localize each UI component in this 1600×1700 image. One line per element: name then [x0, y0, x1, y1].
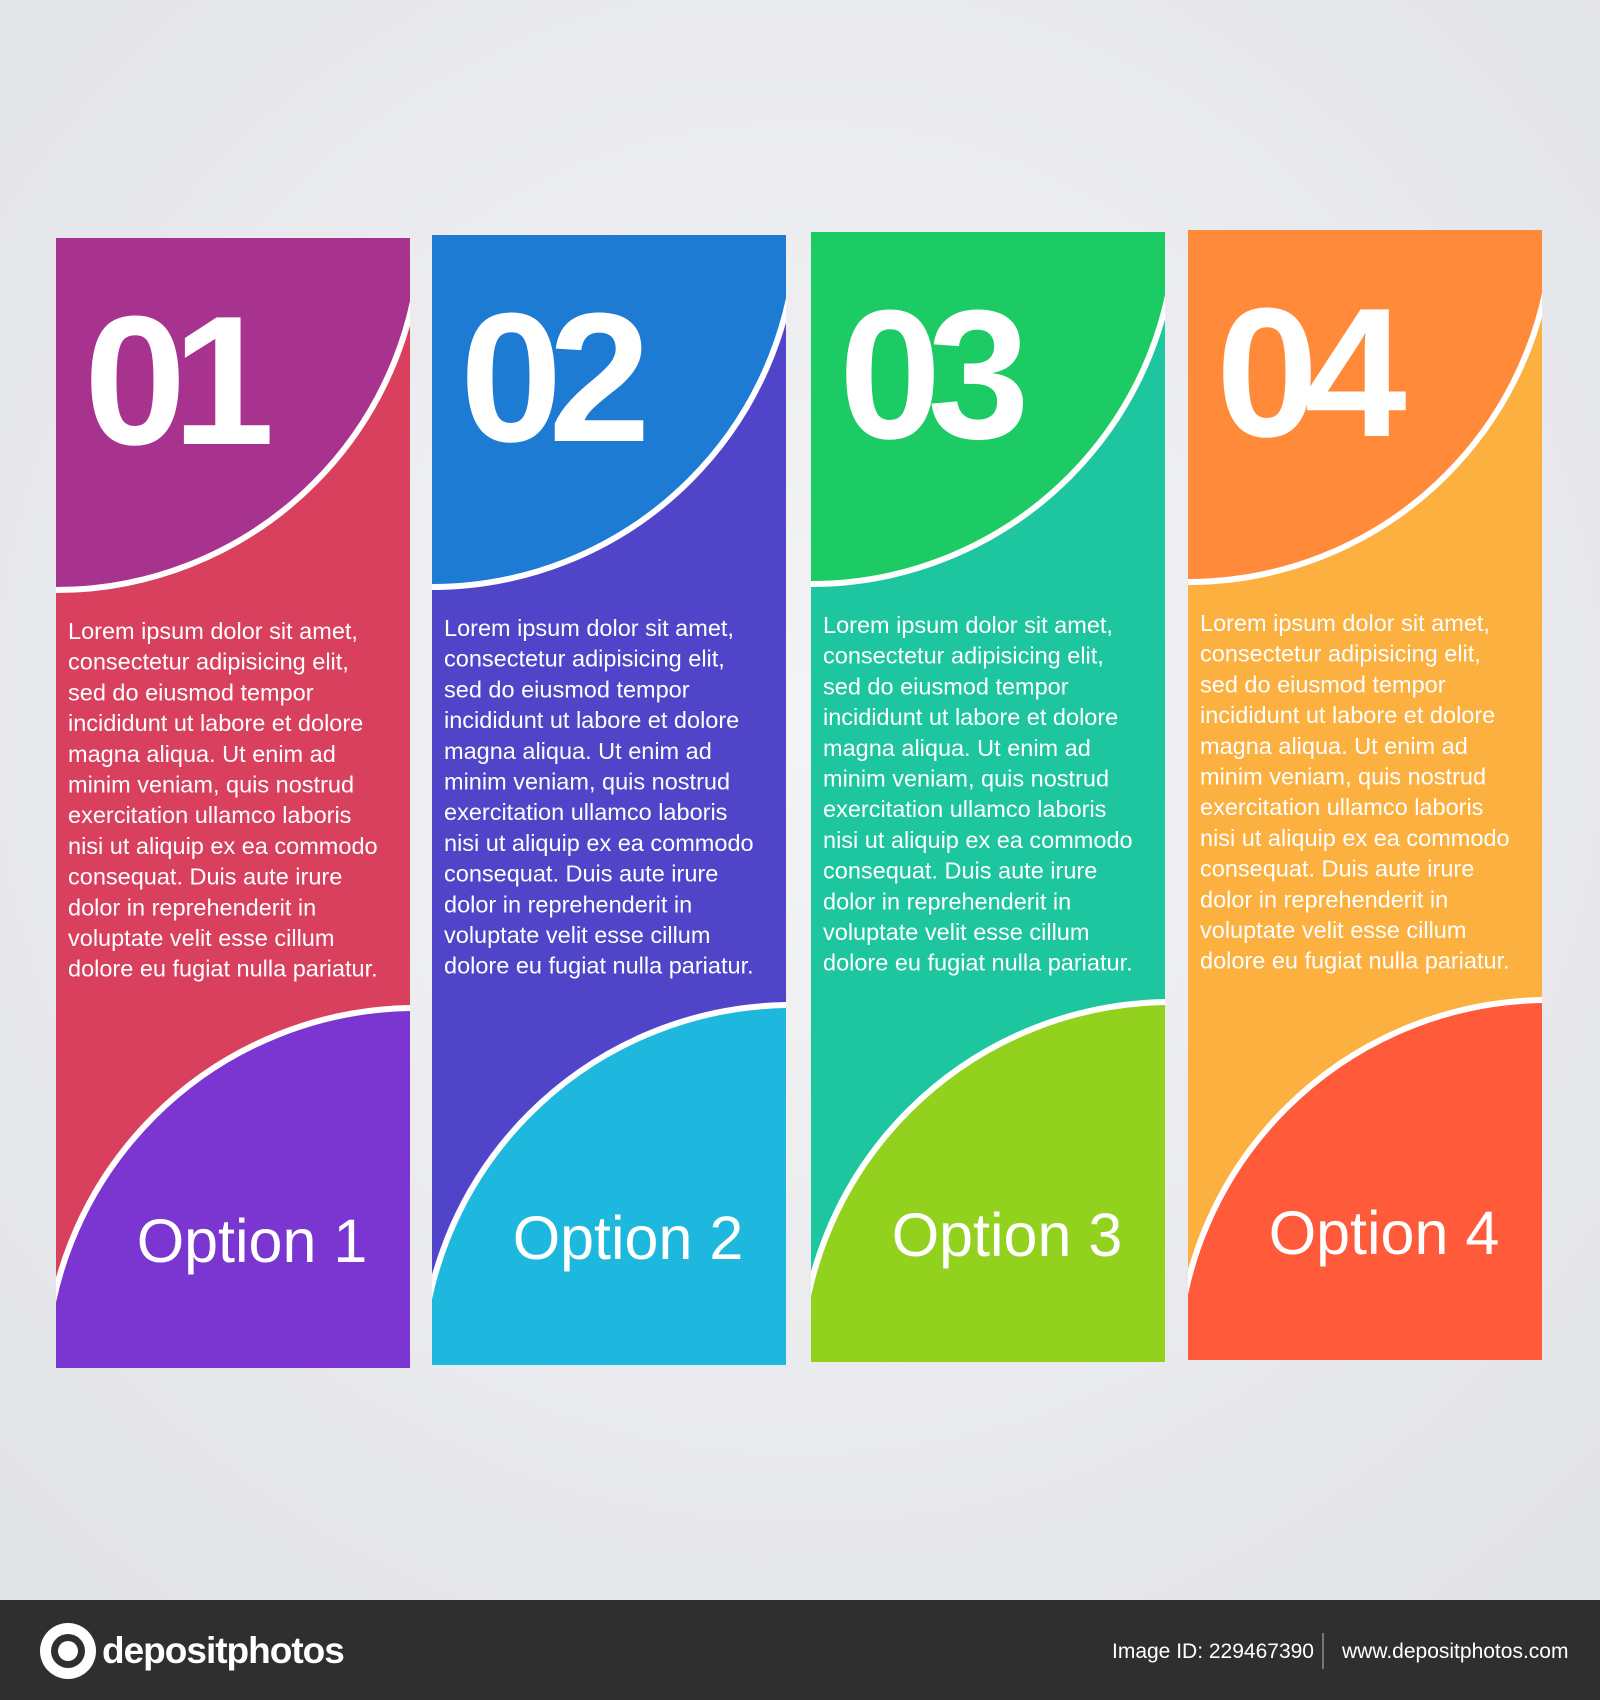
- panel: option 1: nisi ut aliquip ex ea commodo: [68, 833, 378, 859]
- panel: option 1: magna aliqua. Ut enim ad: [68, 741, 336, 767]
- panel: option 3: Option 3: [892, 1201, 1122, 1269]
- panel: option 3: Lorem ipsum dolor sit amet,: [823, 612, 1113, 638]
- panel: option 1: 01: [84, 277, 270, 483]
- panel: option 3: consectetur adipisicing elit,: [823, 643, 1104, 669]
- panel: option 4: magna aliqua. Ut enim ad: [1200, 733, 1468, 759]
- icon: camera logo: [40, 1623, 96, 1679]
- footer bar: [0, 1600, 1600, 1700]
- panel: option 3: magna aliqua. Ut enim ad: [823, 735, 1091, 761]
- panel: option 4: nisi ut aliquip ex ea commodo: [1200, 825, 1510, 851]
- panel: option 2: dolore eu fugiat nulla pariatur.: [444, 953, 754, 979]
- panel: option 4: Lorem ipsum dolor sit amet,: [1200, 610, 1490, 636]
- panel: option 4: minim veniam, quis nostrud: [1200, 764, 1486, 790]
- panel: option 3: voluptate velit esse cillum: [823, 919, 1089, 945]
- panel: option 1: Option 1: [137, 1207, 367, 1275]
- panel: option 4: sed do eiusmod tempor: [1200, 671, 1446, 697]
- panel: option 2: incididunt ut labore et dolore: [444, 707, 739, 733]
- panel: option 2: Lorem ipsum dolor sit amet,: [444, 615, 734, 641]
- panel: option 2: magna aliqua. Ut enim ad: [444, 738, 712, 764]
- panel: option 1: minim veniam, quis nostrud: [68, 772, 354, 798]
- panel: option 3: 03: [839, 271, 1023, 477]
- panel: option 1: consequat. Duis aute irure: [68, 864, 342, 890]
- panel: option 2: consectetur adipisicing elit,: [444, 646, 725, 672]
- panel: option 4: [1188, 230, 1542, 1360]
- panel: option 2: 02: [460, 274, 643, 480]
- panel: option 3: exercitation ullamco laboris: [823, 796, 1106, 822]
- panel: option 3: dolore eu fugiat nulla pariatur.: [823, 950, 1133, 976]
- website: www.depositphotos.com: [1341, 1640, 1568, 1663]
- panel: option 3: [811, 232, 1165, 1362]
- panel: option 4: dolor in reprehenderit in: [1200, 886, 1448, 912]
- panel: option 3: nisi ut aliquip ex ea commodo: [823, 827, 1133, 853]
- panel: option 4: exercitation ullamco laboris: [1200, 794, 1483, 820]
- panel: option 3: sed do eiusmod tempor: [823, 673, 1069, 699]
- panel: option 2: exercitation ullamco laboris: [444, 799, 727, 825]
- panel: option 1: dolor in reprehenderit in: [68, 894, 316, 920]
- panel: option 1: Lorem ipsum dolor sit amet,: [68, 618, 358, 644]
- panel: option 1: [56, 238, 410, 1368]
- panel: option 1: voluptate velit esse cillum: [68, 925, 334, 951]
- panel: option 2: sed do eiusmod tempor: [444, 676, 690, 702]
- panel: option 1: dolore eu fugiat nulla pariatur.: [68, 956, 378, 982]
- panel: option 1: consectetur adipisicing elit,: [68, 649, 349, 675]
- panel: option 3: minim veniam, quis nostrud: [823, 766, 1109, 792]
- brand name: depositphotos: [102, 1630, 344, 1671]
- panel: option 4: voluptate velit esse cillum: [1200, 917, 1466, 943]
- panel: option 3: consequat. Duis aute irure: [823, 858, 1097, 884]
- panel: option 2: consequat. Duis aute irure: [444, 861, 718, 887]
- panel: option 3: dolor in reprehenderit in: [823, 888, 1071, 914]
- image id: Image ID: 229467390: [1112, 1640, 1314, 1663]
- panel: option 2: minim veniam, quis nostrud: [444, 768, 730, 794]
- panel: option 4: 04: [1216, 269, 1406, 475]
- panel: option 2: nisi ut aliquip ex ea commodo: [444, 830, 754, 856]
- panel: option 4: consequat. Duis aute irure: [1200, 856, 1474, 882]
- panel: option 1: sed do eiusmod tempor: [68, 679, 314, 705]
- panel: option 1: exercitation ullamco laboris: [68, 802, 351, 828]
- panel: option 1: incididunt ut labore et dolore: [68, 710, 363, 736]
- panel: option 3: incididunt ut labore et dolore: [823, 704, 1118, 730]
- panel: option 2: [432, 235, 786, 1365]
- panel: option 2: dolor in reprehenderit in: [444, 891, 692, 917]
- panel: option 4: Option 4: [1269, 1199, 1499, 1267]
- panel: option 4: incididunt ut labore et dolore: [1200, 702, 1495, 728]
- panel: option 4: consectetur adipisicing elit,: [1200, 641, 1481, 667]
- panel: option 4: dolore eu fugiat nulla pariatur.: [1200, 948, 1510, 974]
- panel: option 2: voluptate velit esse cillum: [444, 922, 710, 948]
- panel: option 2: Option 2: [513, 1204, 743, 1272]
